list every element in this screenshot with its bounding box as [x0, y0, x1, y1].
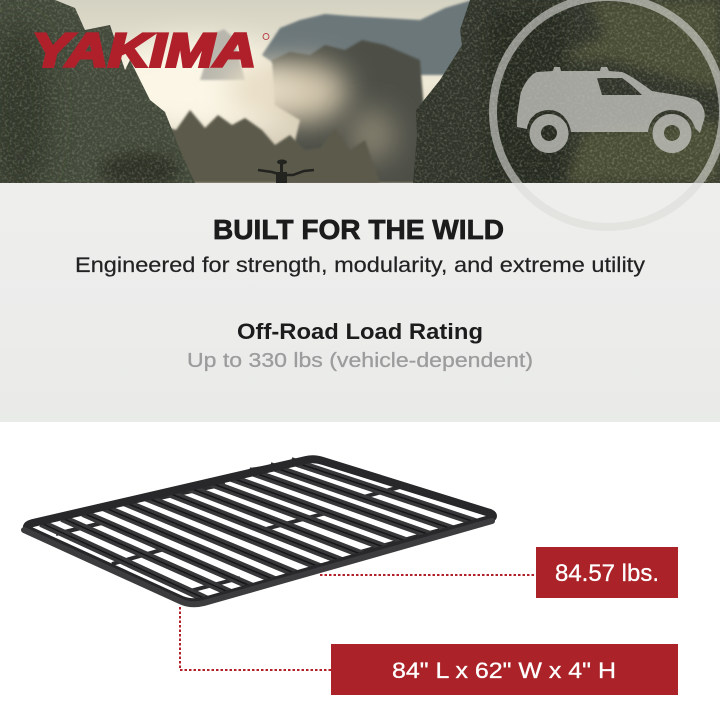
slat grooves	[41, 461, 478, 601]
rack slats	[41, 461, 478, 601]
misty midground conifers	[272, 40, 430, 183]
sky and fog	[55, 0, 470, 183]
callout: weight	[536, 547, 678, 598]
hero photo: misty forest	[0, 0, 720, 200]
icon: circle with vehicle	[493, 0, 720, 227]
callout: dimensions: 84" L x 62" W x 4" H	[392, 658, 616, 683]
circle ring	[493, 0, 720, 227]
callout: weight: 84.57 lbs.	[555, 560, 659, 587]
right tree	[410, 0, 720, 183]
distant mountains	[262, 0, 480, 75]
subheading: Engineered for strength, modularity, and extreme utility	[75, 254, 646, 277]
dotted leader to weight label	[320, 574, 536, 576]
front wheel	[653, 114, 692, 153]
heading: BUILT FOR THE WILD	[213, 214, 504, 245]
dotted leader to dimensions label	[180, 607, 331, 670]
load rating title: Off-Road Load Rating	[237, 319, 483, 344]
callout: dimensions	[331, 644, 678, 695]
rack crossbars	[56, 462, 440, 592]
left tree	[0, 0, 200, 183]
rack front rail	[24, 521, 492, 604]
rack frame	[27, 459, 493, 602]
vehicle silhouette	[517, 67, 705, 133]
rear wheel	[530, 114, 569, 153]
text panel background	[0, 183, 720, 422]
load rating value: Up to 330 lbs (vehicle-dependent)	[187, 350, 533, 372]
foreground conifers	[150, 110, 380, 183]
icon: bike handlebar on vehicle	[258, 160, 314, 183]
roof rack product image	[24, 459, 493, 604]
logo: Yakima: YAKIMA	[32, 24, 256, 76]
